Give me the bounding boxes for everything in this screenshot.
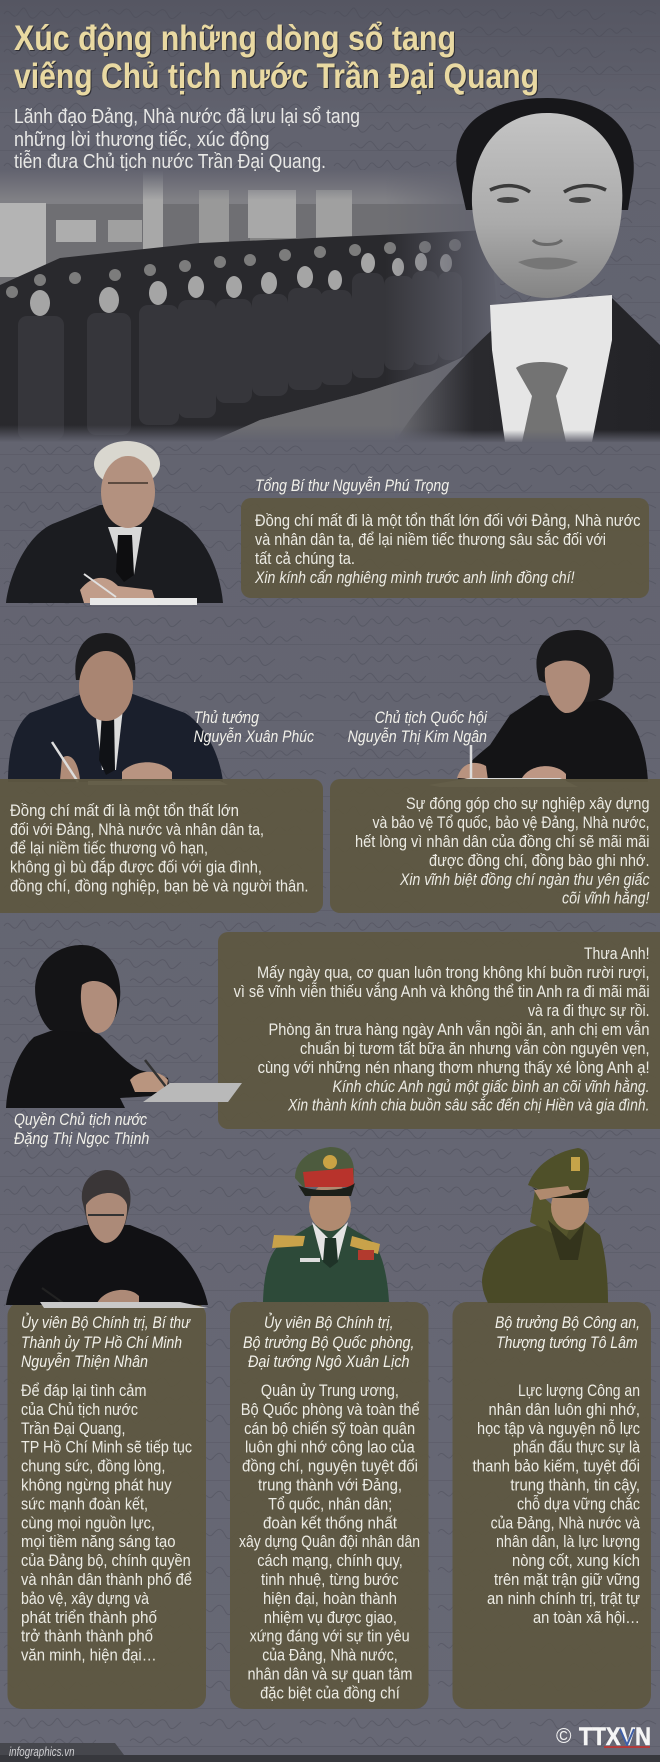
quote text: Nguyễn Thiện Nhân: phát triển thành phố bbox=[21, 1608, 157, 1627]
name: Nguyễn Thiện Nhân bbox=[21, 1313, 191, 1371]
quote text: Ngô Xuân Lịch: nhân dân và sự quan tâm bbox=[248, 1664, 412, 1684]
quote text: Ngô Xuân Lịch: xứng đáng với sự tin yêu bbox=[250, 1627, 410, 1646]
quote text: Nguyễn Thiện Nhân: mọi tiềm năng sáng tạo bbox=[21, 1532, 176, 1551]
quote text: Nguyễn Thiện Nhân: Để đáp lại tình cảm bbox=[21, 1381, 146, 1400]
subtitle: tiễn đưa Chủ tịch nước Trần Đại Quang. bbox=[14, 150, 326, 173]
quote text: Ngô Xuân Lịch: Bộ Quốc phòng và toàn thể bbox=[241, 1400, 420, 1419]
name: Ngô Xuân Lịch: Bộ trưởng Bộ Quốc phòng, bbox=[243, 1333, 414, 1352]
title: viếng Chủ tịch nước Trần Đại Quang bbox=[14, 57, 539, 96]
panel: quote Nguyễn Xuân Phúc: không gì bù đắp được đối với gia đình, bbox=[10, 858, 262, 876]
quote text: Nguyễn Thiện Nhân: sức mạnh đoàn kết, bbox=[21, 1494, 148, 1513]
quote text: Nguyễn Thiện Nhân: TP Hồ Chí Minh sẽ tiếp tục bbox=[21, 1438, 192, 1457]
quote text: Ngô Xuân Lịch: nhiệm vụ được giao, bbox=[264, 1608, 397, 1627]
subtitle: những lời thương tiếc, xúc động bbox=[14, 129, 270, 151]
panel: quote Nguyễn Xuân Phúc: Đồng chí mất đi là một tổn thất lớn bbox=[10, 801, 239, 820]
logo: TTXVN: © bbox=[556, 1725, 572, 1748]
quote text: Tô Lâm: trên mặt trận giữ vững bbox=[494, 1570, 640, 1589]
panel: quote Đặng Thị Ngọc Thịnh bbox=[218, 932, 660, 1129]
quote text: Nguyễn Thiện Nhân bbox=[21, 1381, 192, 1665]
quote text: Tô Lâm: chỗ dựa vững chắc bbox=[517, 1494, 640, 1513]
logo: TTXVN: TTXVN bbox=[579, 1723, 651, 1751]
quote text: Ngô Xuân Lịch: của Đảng, Nhà nước, bbox=[262, 1646, 398, 1665]
name: Nguyễn Thiện Nhân: Thành ủy TP Hồ Chí Minh bbox=[21, 1333, 182, 1352]
quote text: Ngô Xuân Lịch: đồng chí, nguyện tuyệt đối bbox=[242, 1457, 418, 1476]
footer bar bbox=[0, 1755, 660, 1762]
photo: crowd paying respects bbox=[0, 170, 500, 442]
subtitle: Lãnh đạo Đảng, Nhà nước đã lưu lại sổ tang bbox=[14, 106, 360, 128]
panel: quote Nguyễn Xuân Phúc: để lại niềm tiếc thương vô hạn, bbox=[10, 838, 208, 858]
quote text: Ngô Xuân Lịch: Tổ quốc, nhân dân; bbox=[268, 1494, 392, 1513]
quote text: Tô Lâm: trung thành, tin cậy, bbox=[510, 1476, 640, 1494]
quote text: Nguyễn Thiện Nhân: bảo vệ, xây dựng và bbox=[21, 1589, 149, 1608]
quote text: Nguyễn Thiện Nhân: Trần Đại Quang, bbox=[21, 1419, 125, 1438]
name: Ngô Xuân Lịch: Đại tướng Ngô Xuân Lịch bbox=[248, 1352, 410, 1371]
photo: Nguyễn Phú Trọng signing bbox=[6, 441, 223, 605]
panel: quote Nguyễn Thiện Nhân bbox=[8, 1302, 206, 1709]
logo: TTXVN bbox=[556, 1723, 651, 1751]
portrait: President Trần Đại Quang bbox=[395, 98, 660, 443]
panel: quote Ngô Xuân Lịch bbox=[230, 1302, 428, 1709]
quote text: Tô Lâm: thanh bảo kiếm, tuyệt đối bbox=[472, 1457, 640, 1476]
name: Thủ tướng: Thủ tướng bbox=[194, 708, 259, 727]
quote text: Ngô Xuân Lịch: trung thành với Đảng, bbox=[258, 1476, 402, 1494]
quote text: Nguyễn Thiện Nhân: văn minh, hiện đại… bbox=[21, 1646, 157, 1665]
quote text: Ngô Xuân Lịch: Quân ủy Trung ương, bbox=[261, 1381, 399, 1400]
name: Nguyễn Thiện Nhân: Nguyễn Thiện Nhân bbox=[21, 1352, 148, 1371]
quote text: Tô Lâm bbox=[472, 1381, 640, 1627]
panel: quote Nguyễn Xuân Phúc: đối với Đảng, Nhà nước và nhân dân ta, bbox=[10, 820, 264, 839]
quote text: Ngô Xuân Lịch: đặc biệt của đồng chí bbox=[260, 1683, 400, 1702]
photo: Ngô Xuân Lịch in uniform bbox=[263, 1147, 389, 1302]
quote text: Tô Lâm: an ninh chính trị, trật tự bbox=[487, 1589, 640, 1608]
quote text: Nguyễn Thiện Nhân: của Chủ tịch nước bbox=[21, 1400, 138, 1419]
quote text: Ngô Xuân Lịch: xây dựng Quân đội nhân dân bbox=[239, 1532, 420, 1551]
source tab: infographics.vn: infographics.vn bbox=[9, 1745, 75, 1759]
panel: quote Nguyễn Xuân Phúc bbox=[0, 779, 323, 913]
quote text: Nguyễn Thiện Nhân: không ngừng phát huy bbox=[21, 1476, 172, 1494]
quote text: Nguyễn Thiện Nhân: trở thành thành phố bbox=[21, 1627, 153, 1646]
name: Đặng Thị Ngọc Thịnh: Quyền Chủ tịch nước bbox=[14, 1110, 147, 1129]
quote text: Ngô Xuân Lịch: cách mạng, chính quy, bbox=[257, 1551, 403, 1570]
quote text: Nguyễn Thiện Nhân: và nhân dân thành phố để bbox=[21, 1570, 192, 1589]
name: Chủ tịch Quốc hội: Nguyễn Thị Kim Ngân bbox=[348, 727, 487, 746]
quote text: Ngô Xuân Lịch: hiện đại, hoàn thành bbox=[263, 1589, 397, 1608]
panel: quote Nguyễn Phú Trọng: và nhân dân ta, để lại niềm tiếc thương sâu sắc đối với bbox=[255, 530, 606, 549]
quote text: Ngô Xuân Lịch: luôn ghi nhớ công lao của bbox=[245, 1438, 415, 1457]
quote text: Tô Lâm: an toàn xã hội… bbox=[533, 1608, 640, 1627]
name: Chủ tịch Quốc hội bbox=[348, 708, 488, 746]
name: Thủ tướng bbox=[194, 708, 314, 746]
source tab: infographics.vn bbox=[0, 1743, 124, 1759]
panel: quote Nguyễn Phú Trọng: tất cả chúng ta. bbox=[255, 549, 355, 568]
title bbox=[14, 19, 539, 96]
photo: Nguyễn Xuân Phúc signing bbox=[8, 633, 228, 785]
panel: quote Nguyễn Thị Kim Ngân bbox=[330, 779, 660, 913]
photo: Đặng Thị Ngọc Thịnh signing bbox=[6, 945, 242, 1108]
panel: quote Nguyễn Phú Trọng bbox=[241, 498, 649, 598]
quote text: Nguyễn Thiện Nhân: cùng mọi nguồn lực, bbox=[21, 1513, 155, 1532]
quote text: Ngô Xuân Lịch: tinh nhuệ, từng bước bbox=[261, 1570, 399, 1589]
quote text: Ngô Xuân Lịch bbox=[239, 1381, 420, 1702]
quote text: Nguyễn Thiện Nhân: chung sức, đồng lòng, bbox=[21, 1457, 165, 1476]
quote text: Ngô Xuân Lịch: đoàn kết thống nhất bbox=[263, 1513, 397, 1532]
name: Đặng Thị Ngọc Thịnh: Đặng Thị Ngọc Thịnh bbox=[14, 1129, 149, 1148]
quote text: Nguyễn Thiện Nhân: của Đảng bộ, chính quyền bbox=[21, 1551, 191, 1570]
name: Chủ tịch Quốc hội: Chủ tịch Quốc hội bbox=[375, 708, 488, 727]
photo: Nguyễn Thị Kim Ngân signing bbox=[429, 630, 648, 787]
name: Ngô Xuân Lịch: Ủy viên Bộ Chính trị, bbox=[264, 1313, 394, 1332]
quote text: Tô Lâm: nòng cốt, xung kích bbox=[512, 1551, 640, 1570]
name: Thủ tướng: Nguyễn Xuân Phúc bbox=[194, 727, 314, 746]
name: Nguyễn Thiện Nhân: Ủy viên Bộ Chính trị, Bí thư bbox=[21, 1313, 191, 1332]
name: Đặng Thị Ngọc Thịnh bbox=[14, 1110, 149, 1148]
panel: quote Nguyễn Xuân Phúc: đồng chí, đồng nghiệp, bạn bè và người thân. bbox=[10, 876, 308, 896]
photo: Tô Lâm saluting bbox=[482, 1148, 608, 1303]
quote text: Tô Lâm: nhân dân luôn ghi nhớ, bbox=[488, 1400, 640, 1419]
subtitle bbox=[14, 106, 360, 173]
quote name: Tổng Bí thư: Tổng Bí thư Nguyễn Phú Trọng bbox=[255, 476, 449, 495]
photo: Nguyễn Thiện Nhân signing bbox=[6, 1170, 208, 1308]
title: Xúc động những dòng sổ tang bbox=[14, 19, 456, 58]
panel: quote Tô Lâm bbox=[452, 1302, 651, 1709]
quote text: Ngô Xuân Lịch: cán bộ chiến sỹ toàn quân bbox=[244, 1419, 415, 1438]
name: Ngô Xuân Lịch bbox=[243, 1313, 414, 1371]
panel: quote Nguyễn Phú Trọng: Xin kính cẩn nghiêng mình trước anh linh đồng chí! bbox=[254, 568, 575, 587]
name: Tô Lâm bbox=[495, 1313, 640, 1352]
